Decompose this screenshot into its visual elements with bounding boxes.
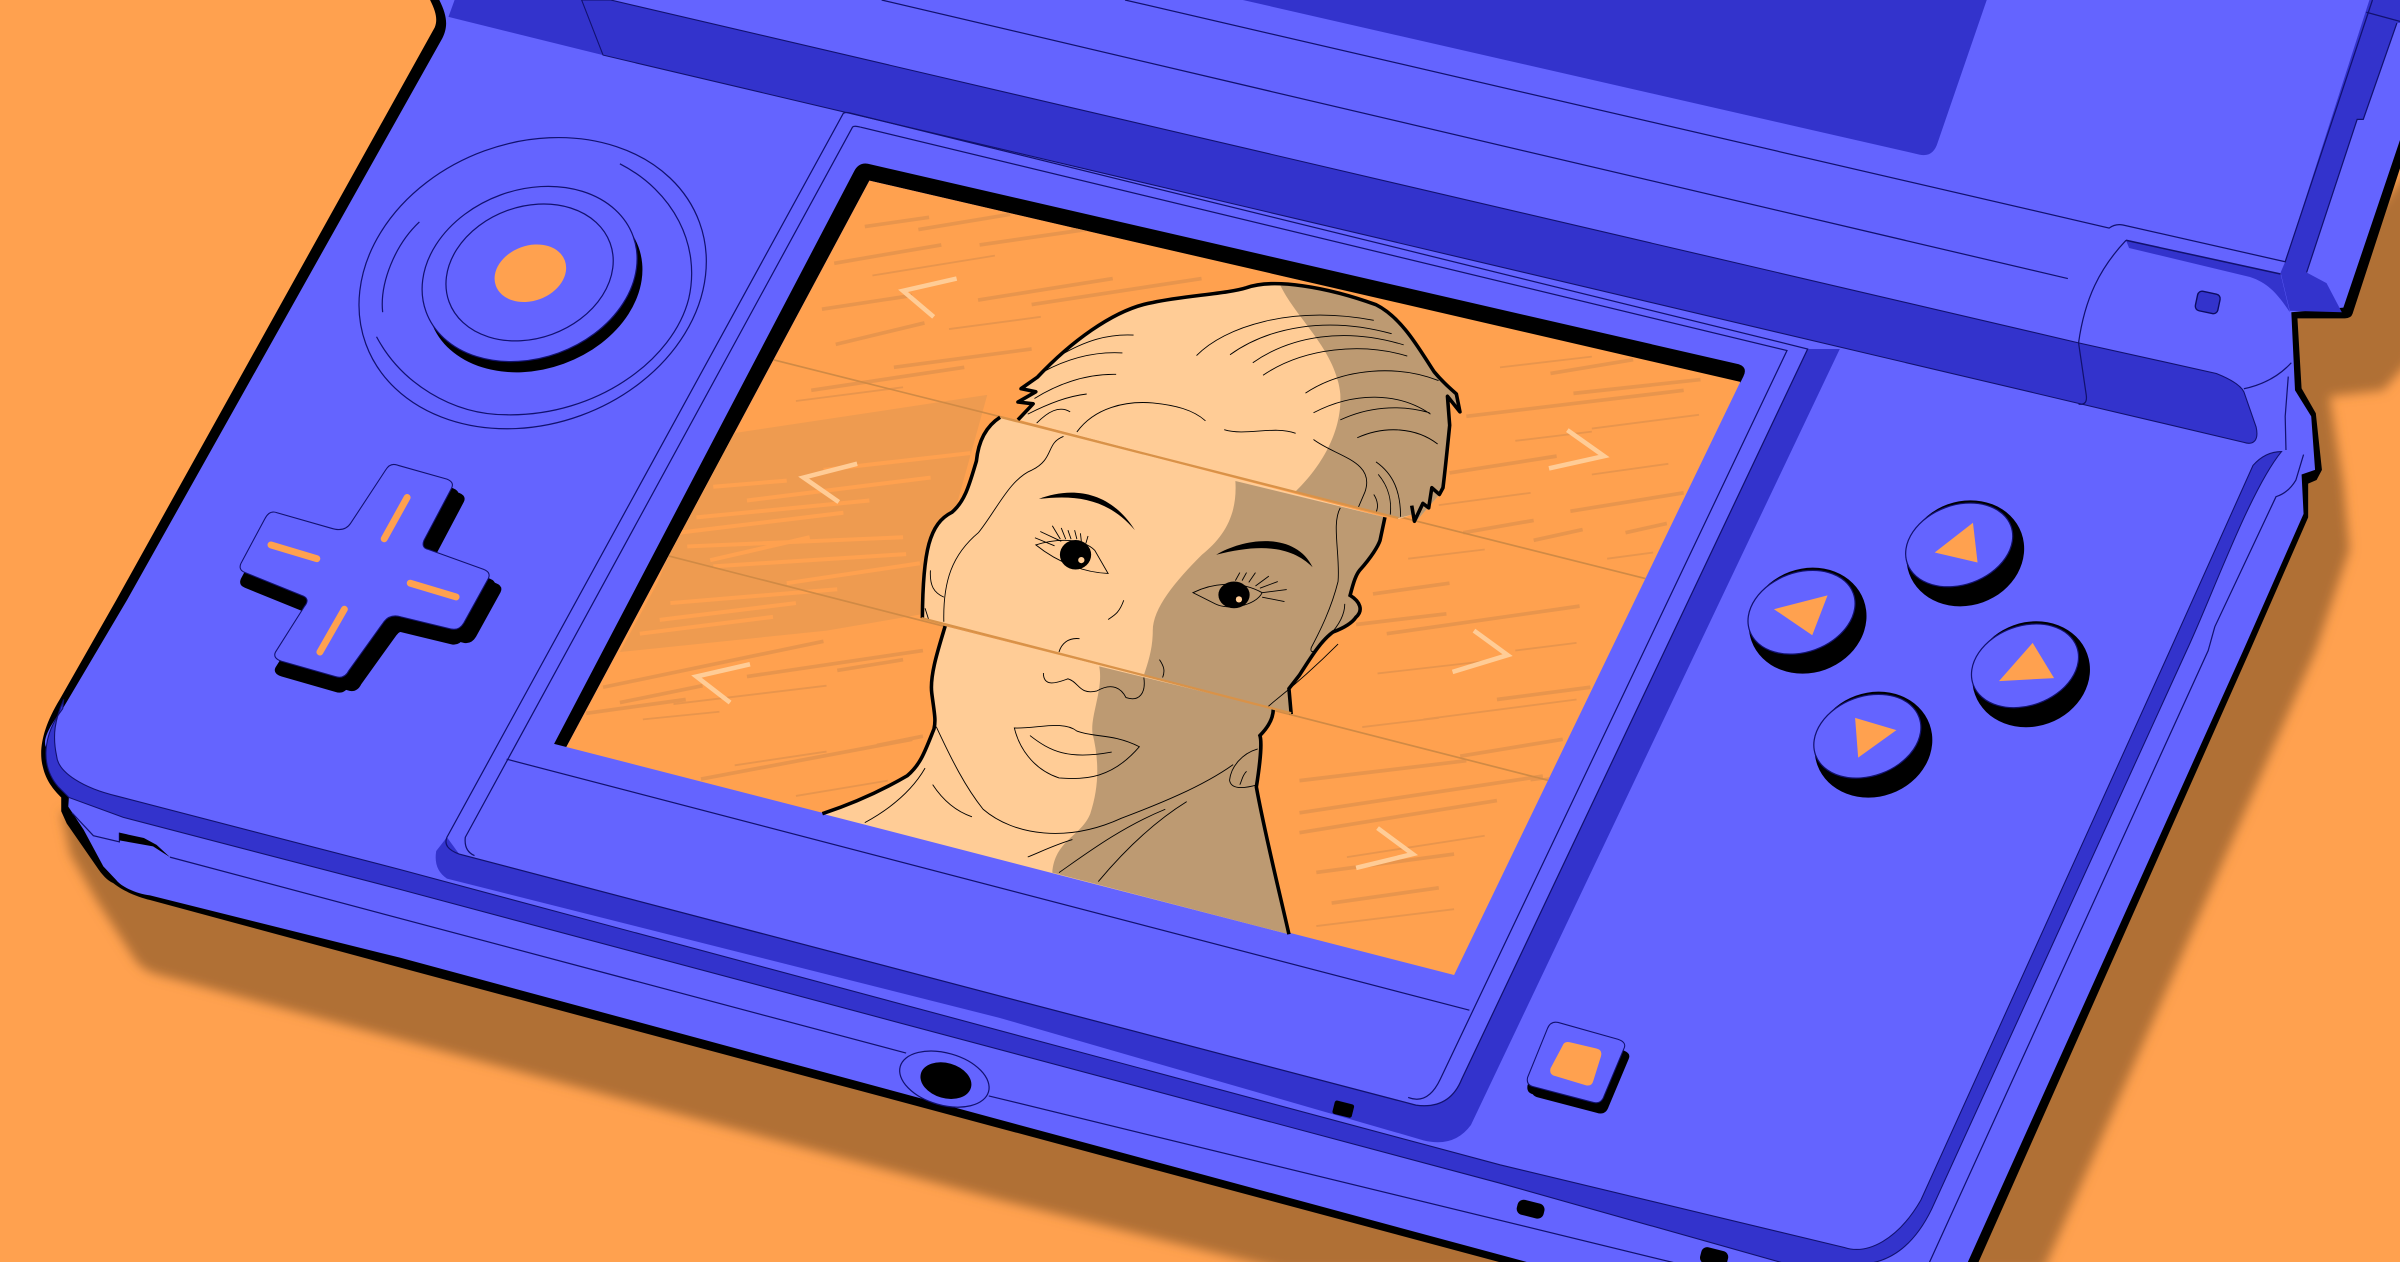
portrait: middle slice with eyes bbox=[921, 417, 1385, 714]
lid detail lines bbox=[882, 0, 2400, 1262]
lid: dark hinge band bbox=[448, 0, 2400, 443]
portrait: eyes bbox=[1060, 540, 1091, 569]
square home button bbox=[1527, 1022, 1629, 1114]
wood grain bbox=[620, 395, 987, 652]
front edge details bbox=[72, 813, 1730, 1262]
front seam lines bbox=[72, 813, 1681, 1262]
left notch bbox=[119, 833, 170, 857]
on-screen chevrons bbox=[696, 279, 1604, 868]
analog pad orange dot bbox=[486, 235, 574, 312]
game screen bbox=[554, 164, 1745, 975]
portrait: bottom slice with mouth bbox=[822, 626, 1289, 934]
small front slots bbox=[1332, 1100, 1355, 1118]
headphone jack bbox=[893, 1041, 996, 1117]
d-pad bbox=[240, 464, 501, 693]
portrait on screen bbox=[822, 284, 1460, 934]
hinge strip and LED bbox=[2126, 240, 2290, 315]
lid: upper screen bbox=[1243, 0, 1987, 155]
analog pad outer ring bbox=[318, 90, 748, 476]
screen background bbox=[566, 181, 1740, 975]
screen black frame bbox=[554, 164, 1745, 747]
portrait: nose and lips bbox=[865, 673, 1258, 882]
screen bezel bbox=[436, 113, 1840, 1142]
analog pad bbox=[318, 90, 748, 476]
button: left bbox=[1734, 551, 1882, 690]
analog pad stick bbox=[403, 168, 667, 401]
button: right bbox=[1957, 605, 2105, 744]
dark front band bbox=[46, 452, 2282, 1262]
portrait: slice seams bbox=[921, 417, 1398, 713]
button: top bbox=[1891, 484, 2039, 623]
action buttons bbox=[1734, 484, 2105, 814]
portrait: eyebrows bbox=[1039, 493, 1135, 530]
d-pad orange marks bbox=[271, 497, 456, 652]
screen seams bbox=[773, 360, 1645, 579]
portrait: top slice with hair bbox=[1018, 284, 1460, 521]
bezel dark band bbox=[436, 349, 1840, 1142]
lid: side rail bbox=[2281, 0, 2400, 312]
button: bottom bbox=[1800, 675, 1947, 814]
